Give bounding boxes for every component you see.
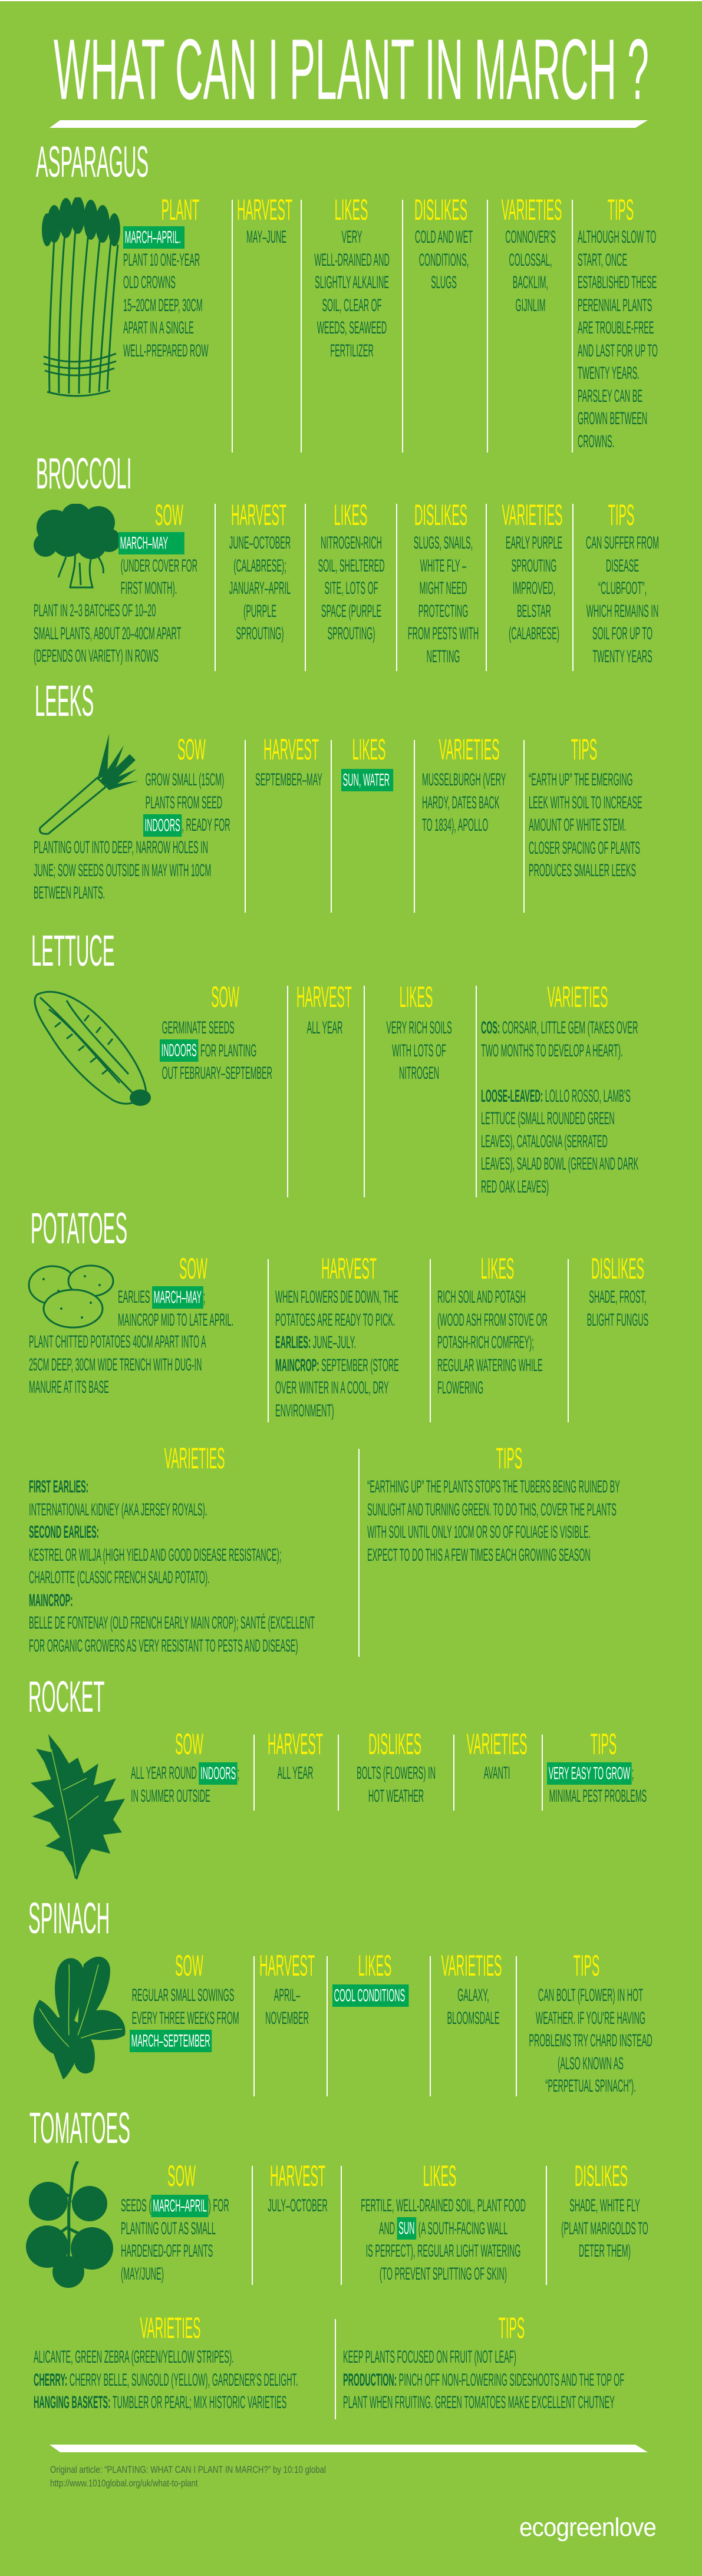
text: sow continued: PLANT CHITTED POTATOES 40CM APART INTO A [29, 1332, 206, 1352]
text: likes [314, 227, 390, 361]
text: tips: VERY EASY TO GROW; [549, 1763, 634, 1783]
text: sow: SEEDS (MARCH–APRIL) FOR [121, 2196, 229, 2215]
footer: source credit: Original article: “PLANTING: WHAT CAN I PLANT IN MARCH?” by 10:10 global [50, 2464, 326, 2475]
section: tomatoes: LIKES [423, 2159, 456, 2192]
text: tips [578, 227, 658, 451]
text: plant: MARCH–APRIL. [125, 227, 181, 247]
text: sow: INDOORS FOR PLANTING [162, 1041, 256, 1061]
column headers [0, 1894, 702, 1895]
text: sow: MARCH–SEPTEMBER [131, 2031, 210, 2050]
text: harvest: MAINCROP: SEPTEMBER (STORE [275, 1355, 399, 1375]
section: asparagus: HARVEST [237, 193, 292, 226]
text: sow: OUT FEBRUARY–SEPTEMBER [162, 1064, 272, 1083]
text: tips: EXPECT TO DO THIS A FEW TIMES EACH GROWING SEASON [367, 1545, 591, 1565]
icon: broccoli [34, 504, 118, 588]
text: sow [130, 1984, 239, 2053]
section: leeks: VARIETIES [439, 733, 499, 766]
text: harvest: ALL YEAR [307, 1018, 342, 1038]
text: sow continued: SMALL PLANTS, ABOUT 20–40CM APART [34, 623, 181, 643]
text: sow [121, 2195, 229, 2286]
section: leeks [34, 676, 642, 913]
text: harvest: POTATOES ARE READY TO PICK. [275, 1310, 396, 1329]
text: likes [361, 2195, 526, 2286]
text: likes: REGULAR WATERING WHILE [437, 1355, 542, 1375]
text: tips [529, 770, 642, 880]
text: varieties: COS: CORSAIR, LITTLE GEM (TAKES OVER [481, 1018, 638, 1038]
text: sow continued: 25CM DEEP, 30CM WIDE TRENCH WITH DUG-IN [29, 1355, 202, 1374]
text: varieties: BELLE DE FONTENAY (OLD FRENCH EARLY MAIN CROP); SANTÉ (EXCELLENT [29, 1613, 315, 1633]
text: dislikes [587, 1286, 648, 1332]
text: plant: 15–20CM DEEP, 30CM [123, 296, 203, 315]
section: lettuce: VARIETIES [548, 980, 608, 1013]
heading: tomatoes: TOMATOES [29, 2103, 130, 2152]
text: sow: (UNDER COVER FOR [121, 556, 197, 575]
text: dislikes: WHITE FLY – [420, 556, 466, 575]
text: varieties: SPROUTING [512, 556, 556, 575]
text: tips [547, 1762, 647, 1808]
text: harvest: NOVEMBER [265, 2008, 309, 2028]
section: potatoes: DISLIKES [591, 1252, 644, 1285]
text: harvest: OVER WINTER IN A COOL, DRY [275, 1378, 389, 1398]
text: sow continued: JUNE; SOW SEEDS OUTSIDE IN MAY WITH 10CM [34, 860, 211, 880]
text: dislikes [415, 227, 473, 292]
heading: asparagus: ASPARAGUS [36, 137, 149, 186]
text: harvest: (CALABRESE); [233, 556, 286, 575]
text: sow [118, 532, 197, 598]
text: tips: LEEK WITH SOIL TO INCREASE [529, 793, 642, 812]
section: broccoli: HARVEST [231, 498, 286, 531]
text: likes: FLOWERING [437, 1378, 483, 1398]
section: broccoli: DISLIKES [414, 498, 467, 531]
section: broccoli [34, 449, 659, 671]
text: harvest: WHEN FLOWERS DIE DOWN, THE [275, 1287, 398, 1307]
text: tips: KEEP PLANTS FOCUSED ON FRUIT (NOT LEAF) [343, 2347, 516, 2367]
text: dislikes: CONDITIONS, [419, 250, 469, 270]
section: rocket: TIPS [591, 1728, 617, 1761]
text: tips: SOIL FOR UP TO [592, 624, 652, 643]
section: broccoli: SOW [155, 498, 183, 531]
section: broccoli: TIPS [608, 498, 634, 531]
text: plant: PLANT 10 ONE-YEAR [123, 250, 200, 270]
text: tips: AMOUNT OF WHITE STEM. [529, 815, 626, 835]
text: sow: PLANTS FROM SEED [146, 793, 222, 812]
text: harvest [265, 1984, 309, 2030]
text: sow [160, 1018, 272, 1083]
heading: broccoli: BROCCOLI [36, 449, 131, 498]
text: likes: SUN, WATER [343, 770, 390, 790]
section: lettuce: HARVEST [296, 980, 352, 1013]
text: tips: WEATHER. IF YOU'RE HAVING [536, 2008, 645, 2028]
section: potatoes: LIKES [481, 1252, 514, 1285]
text: tips: “EARTHING UP” THE PLANTS STOPS THE TUBERS BEING RUINED BY [367, 1477, 620, 1497]
text: likes: WELL-DRAINED AND [314, 250, 390, 270]
text: varieties [505, 227, 556, 315]
text: varieties: TWO MONTHS TO DEVELOP A HEART). [481, 1041, 623, 1061]
text: tips: PRODUCES SMALLER LEEKS [529, 861, 636, 880]
text: tips: “CLUBFOOT”, [598, 579, 647, 598]
section: spinach: HARVEST [259, 1949, 315, 1982]
text: tips: PROBLEMS TRY CHARD INSTEAD [529, 2031, 652, 2050]
text: varieties: SECOND EARLIES: [29, 1523, 99, 1542]
text: sow: ALL YEAR ROUND INDOORS; [131, 1763, 239, 1783]
text: likes: SPROUTING) [328, 624, 375, 643]
text: varieties: LOOSE-LEAVED: LOLLO ROSSO, LAMB'S [481, 1086, 631, 1105]
text: likes: WEEDS, SEAWEED [317, 318, 387, 338]
text: tips: (ALSO KNOWN AS [558, 2054, 624, 2073]
text: dislikes: NETTING [427, 647, 460, 666]
text: dislikes: PROTECTING [418, 601, 468, 621]
icon: potatoes [28, 1264, 114, 1328]
text: dislikes: MIGHT NEED [420, 579, 467, 598]
text: sow continued: PLANTING OUT INTO DEEP, NARROW HOLES IN [34, 838, 208, 857]
text: varieties: CHERRY: CHERRY BELLE, SUNGOLD (YELLOW), GARDENER'S DELIGHT. [34, 2370, 298, 2390]
text: plant: WELL-PREPARED ROW [123, 341, 209, 361]
text: sow continued: (DEPENDS ON VARIETY) IN ROWS [34, 646, 159, 666]
text: likes: POTASH-RICH COMFREY); [437, 1333, 534, 1352]
text: tips: ALTHOUGH SLOW TO [578, 227, 656, 247]
text: tips: PRODUCTION: PINCH OFF NON-FLOWERING SIDESHOOTS AND THE TOP OF [343, 2370, 624, 2390]
icon: tomatoes [26, 2161, 114, 2288]
text: tips: DISEASE [606, 556, 639, 575]
text: harvest: SPROUTING) [236, 624, 284, 643]
text: sow continued: BETWEEN PLANTS. [34, 883, 105, 903]
text: likes: RICH SOIL AND POTASH [437, 1287, 526, 1307]
section: asparagus [36, 137, 658, 453]
text: varieties: CHARLOTTE (CLASSIC FRENCH SALAD POTATO). [29, 1568, 210, 1587]
text: likes: VERY [342, 227, 362, 247]
text: varieties: INTERNATIONAL KIDNEY (AKA JERSEY ROYALS). [29, 1500, 207, 1519]
text: sow: EVERY THREE WEEKS FROM [132, 2008, 239, 2028]
text: tips: START, ONCE [578, 250, 627, 270]
section: lettuce: SOW [211, 980, 239, 1013]
section: tomatoes: DISLIKES [575, 2159, 628, 2192]
text: varieties: FIRST EARLIES: [29, 1477, 88, 1497]
heading: leeks: LEEKS [35, 676, 94, 725]
column headers [0, 2103, 702, 2104]
text: dislikes: BOLTS (FLOWERS) IN [357, 1763, 436, 1783]
heading: potatoes: POTATOES [31, 1204, 127, 1253]
section: asparagus: PLANT [162, 193, 199, 226]
text: likes: SOIL, CLEAR OF [322, 296, 382, 315]
text: harvest: SEPTEMBER–MAY [255, 770, 322, 790]
text: harvest: (PURPLE [243, 601, 276, 621]
text: varieties [447, 1984, 499, 2030]
section: broccoli: VARIETIES [502, 498, 562, 531]
text: sow: MAINCROP MID TO LATE APRIL. [118, 1310, 233, 1329]
text: likes: COOL CONDITIONS [334, 1986, 405, 2005]
header: varieties: VARIETIES [140, 2311, 200, 2344]
text: tips [343, 2346, 624, 2415]
text: sow [118, 1286, 233, 1329]
text: varieties: FOR ORGANIC GROWERS AS VERY RESISTANT TO PESTS AND DISEASE) [29, 1636, 298, 1656]
text: tips [367, 1476, 620, 1567]
section: tomatoes: HARVEST [270, 2159, 325, 2192]
section: asparagus: LIKES [335, 193, 368, 226]
section: rocket: SOW [175, 1728, 203, 1761]
text: sow: FIRST MONTH). [121, 579, 177, 598]
text: likes [386, 1018, 452, 1083]
text: likes [437, 1287, 548, 1398]
text: varieties: ALICANTE, GREEN ZEBRA (GREEN/YELLOW STRIPES). [34, 2347, 234, 2367]
section: asparagus: TIPS [608, 193, 634, 226]
text: dislikes [408, 533, 479, 666]
text: varieties: HANGING BASKETS: TUMBLER OR PEARL; MIX HISTORIC VARIETIES [34, 2393, 286, 2412]
text: harvest: JULY–OCTOBER [268, 2196, 328, 2215]
section: tomatoes: SOW [167, 2159, 196, 2192]
text: dislikes: HOT WEATHER [368, 1786, 424, 1805]
text: varieties: (CALABRESE) [509, 624, 559, 643]
text: harvest: APRIL– [274, 1986, 300, 2005]
text: dislikes: SHADE, WHITE FLY [569, 2196, 640, 2215]
column headers [177, 733, 597, 766]
text: dislikes: (PLANT MARIGOLDS TO [561, 2219, 648, 2238]
text: sow continued [34, 838, 211, 903]
text: dislikes [561, 2195, 648, 2263]
text: plant: APART IN A SINGLE [123, 318, 194, 338]
text: dislikes: DETER THEM) [579, 2241, 631, 2261]
text: dislikes [357, 1762, 436, 1808]
text: sow continued [34, 601, 182, 666]
text: harvest [229, 533, 291, 643]
text: sow: EARLIES MARCH–MAY; [118, 1287, 205, 1307]
text: sow: GROW SMALL (15CM) [146, 770, 224, 790]
column headers [155, 498, 634, 531]
text: varieties: LEAVES), CATALOGNA (SERRATED [481, 1131, 608, 1151]
heading: spinach: SPINACH [28, 1894, 110, 1943]
text: harvest: JUNE–OCTOBER [229, 533, 291, 553]
text: tips: TWENTY YEARS [592, 647, 652, 666]
section: rocket [0, 1673, 702, 1885]
text: varieties: LEAVES), SALAD BOWL (GREEN AND DARK [481, 1154, 638, 1174]
section: spinach [0, 1894, 702, 2101]
column headers [179, 1252, 644, 1285]
column headers [0, 1673, 702, 1674]
text: varieties [29, 1476, 315, 1657]
text: varieties: GIJNLIM [516, 296, 545, 315]
text: likes: VERY RICH SOILS [386, 1018, 452, 1038]
text: varieties: LETTUCE (SMALL ROUNDED GREEN [481, 1109, 615, 1128]
text: tips: WHICH REMAINS IN [586, 601, 658, 621]
section: leeks: SOW [177, 733, 206, 766]
section: broccoli: LIKES [334, 498, 367, 531]
text: varieties: COLOSSAL, [509, 250, 552, 270]
text: tips: “EARTH UP” THE EMERGING [529, 770, 633, 790]
section: rocket: HARVEST [268, 1728, 323, 1761]
text: varieties: BACKLIM, [513, 273, 548, 292]
section: lettuce [31, 926, 639, 1197]
header: varieties: VARIETIES [164, 1442, 225, 1475]
text: likes: NITROGEN-RICH [321, 533, 382, 553]
text: tips: AND LAST FOR UP TO [578, 341, 658, 361]
section: tomatoes [0, 2103, 702, 2428]
section: spinach: VARIETIES [441, 1949, 502, 1982]
text: sow: (MAY/JUNE) [121, 2264, 164, 2284]
text: likes [318, 533, 385, 643]
section: asparagus: DISLIKES [414, 193, 467, 226]
text: varieties [34, 2346, 298, 2415]
text: tips [529, 1984, 652, 2098]
text: likes: SOIL, SHELTERED [318, 556, 385, 575]
text: varieties: BLOOMSDALE [447, 2008, 499, 2028]
text: tips: GROWN BETWEEN [578, 409, 647, 428]
text: sow [131, 1762, 239, 1808]
text: varieties [506, 533, 562, 643]
text: likes: WITH LOTS OF [392, 1041, 446, 1061]
text: harvest: JANUARY–APRIL [229, 579, 291, 598]
text: tips: ARE TROUBLE-FREE [578, 318, 654, 338]
footer: ecogreenlove logo: ecogreenlove [519, 2513, 656, 2542]
text: sow continued: PLANT IN 2–3 BATCHES OF 10–20 [34, 601, 156, 620]
text: sow: IN SUMMER OUTSIDE [131, 1786, 210, 1805]
text: sow continued [29, 1332, 206, 1397]
text: sow: HARDENED-OFF PLANTS [121, 2241, 213, 2261]
footer: source credit [50, 2463, 326, 2490]
text: varieties: HARDY, DATES BACK [422, 793, 499, 812]
text: likes: AND SUN (A SOUTH-FACING WALL [379, 2219, 507, 2238]
column headers [211, 980, 608, 1013]
section: potatoes: HARVEST [321, 1252, 377, 1285]
text: tips: SUNLIGHT AND TURNING GREEN. TO DO THIS, COVER THE PLANTS [367, 1500, 617, 1519]
text: varieties: AVANTI [484, 1763, 510, 1783]
text: tips: ESTABLISHED THESE [578, 273, 657, 292]
footer bar [0, 2439, 702, 2457]
section: leeks: TIPS [571, 733, 597, 766]
text: likes: SITE, LOTS OF [324, 579, 378, 598]
text: dislikes: FROM PESTS WITH [408, 624, 479, 643]
text: tips [586, 533, 659, 666]
text: harvest: MAY–JUNE [246, 227, 286, 247]
footer: source credit: http://www.1010global.org/uk/what-to-plant [50, 2478, 198, 2489]
text: plant [123, 226, 209, 361]
icon: rocket [28, 1731, 128, 1880]
text: harvest [275, 1287, 399, 1420]
text: varieties: MUSSELBURGH (VERY [422, 770, 506, 790]
icon: lettuce [34, 991, 151, 1106]
text: harvest: ENVIRONMENT) [275, 1401, 334, 1420]
text: tips: PARSLEY CAN BE [578, 387, 642, 405]
text: likes: FERTILIZER [330, 341, 374, 361]
text: likes: SPACE (PURPLE [321, 601, 381, 621]
text: varieties: TO 1834), APOLLO [422, 815, 488, 835]
text: tips: CROWNS. [578, 431, 614, 451]
section: potatoes: SOW [179, 1252, 207, 1285]
text: tips: CAN SUFFER FROM [586, 533, 659, 553]
text: tips: MINIMAL PEST PROBLEMS [549, 1786, 647, 1805]
text: varieties: KESTREL OR WILJA (HIGH YIELD AND GOOD DISEASE RESISTANCE); [29, 1545, 281, 1565]
text: varieties: MAINCROP: [29, 1591, 73, 1610]
column headers [162, 193, 634, 226]
text: tips: PERENNIAL PLANTS [578, 296, 652, 315]
text: likes: IS PERFECT), REGULAR LIGHT WATERING [366, 2241, 520, 2261]
text: varieties: BELSTAR [517, 601, 551, 621]
heading: lettuce: LETTUCE [31, 926, 115, 975]
section: spinach: LIKES [358, 1949, 391, 1982]
text: tips: CLOSER SPACING OF PLANTS [529, 838, 640, 858]
text: likes: FERTILE, WELL-DRAINED SOIL, PLANT FOOD [361, 2196, 526, 2215]
text: harvest: ALL YEAR [278, 1763, 313, 1783]
text: varieties [422, 770, 506, 835]
section: spinach: TIPS [574, 1949, 599, 1982]
text: varieties: CONNOVER'S [505, 227, 556, 247]
section: rocket: DISLIKES [368, 1728, 421, 1761]
text: tips: “PERPETUAL SPINACH”). [545, 2076, 636, 2096]
section: leeks: HARVEST [263, 733, 319, 766]
text: dislikes: BLIGHT FUNGUS [587, 1310, 648, 1329]
text: sow [143, 770, 230, 837]
text: varieties [481, 1018, 639, 1196]
text: dislikes: SHADE, FROST, [589, 1287, 647, 1307]
text: likes: NITROGEN [399, 1064, 439, 1083]
text: sow continued: MANURE AT ITS BASE [29, 1378, 109, 1397]
text: dislikes: SLUGS [431, 273, 457, 292]
text: tips: WITH SOIL UNTIL ONLY 10CM OR SO OF FOLIAGE IS VISIBLE. [367, 1523, 591, 1542]
text: sow: INDOORS, READY FOR [145, 815, 230, 835]
text: tips: TWENTY YEARS. [578, 364, 640, 383]
text: varieties: IMPROVED, [513, 579, 555, 598]
text: tips: CAN BOLT (FLOWER) IN HOT [538, 1986, 643, 2005]
section: rocket: VARIETIES [467, 1728, 527, 1761]
header: tips: TIPS [499, 2311, 525, 2344]
text: dislikes: COLD AND WET [415, 227, 473, 247]
text: likes: SLIGHTLY ALKALINE [315, 273, 389, 292]
text: likes: (TO PREVENT SPLITTING OF SKIN) [380, 2264, 507, 2284]
icon: leek [39, 734, 139, 835]
heading: rocket: ROCKET [28, 1672, 105, 1721]
text: sow: PLANTING OUT AS SMALL [121, 2219, 216, 2238]
text: plant: OLD CROWNS [123, 273, 176, 292]
section: leeks: LIKES [352, 733, 385, 766]
text: harvest: EARLIES: JUNE–JULY. [275, 1333, 356, 1352]
section: asparagus: VARIETIES [502, 193, 562, 226]
text: tips: PLANT WHEN FRUITING. GREEN TOMATOES MAKE EXCELLENT CHUTNEY [343, 2393, 615, 2412]
section: lettuce: LIKES [400, 980, 433, 1013]
text: varieties: RED OAK LEAVES) [481, 1177, 549, 1196]
text: varieties: EARLY PURPLE [506, 533, 562, 553]
text: likes: (WOOD ASH FROM STOVE OR [437, 1310, 548, 1329]
icon: asparagus [42, 197, 120, 397]
icon: spinach [28, 1953, 129, 2081]
text: dislikes: SLUGS, SNAILS, [414, 533, 473, 553]
text: sow: GERMINATE SEEDS [162, 1018, 235, 1038]
header: tips: TIPS [496, 1442, 522, 1475]
text: sow: MARCH–MAY [120, 533, 168, 553]
section: potatoes [28, 1204, 648, 1657]
text: varieties: GALAXY, [457, 1986, 489, 2005]
text: sow: REGULAR SMALL SOWINGS [132, 1986, 234, 2005]
section: spinach: SOW [175, 1949, 203, 1982]
